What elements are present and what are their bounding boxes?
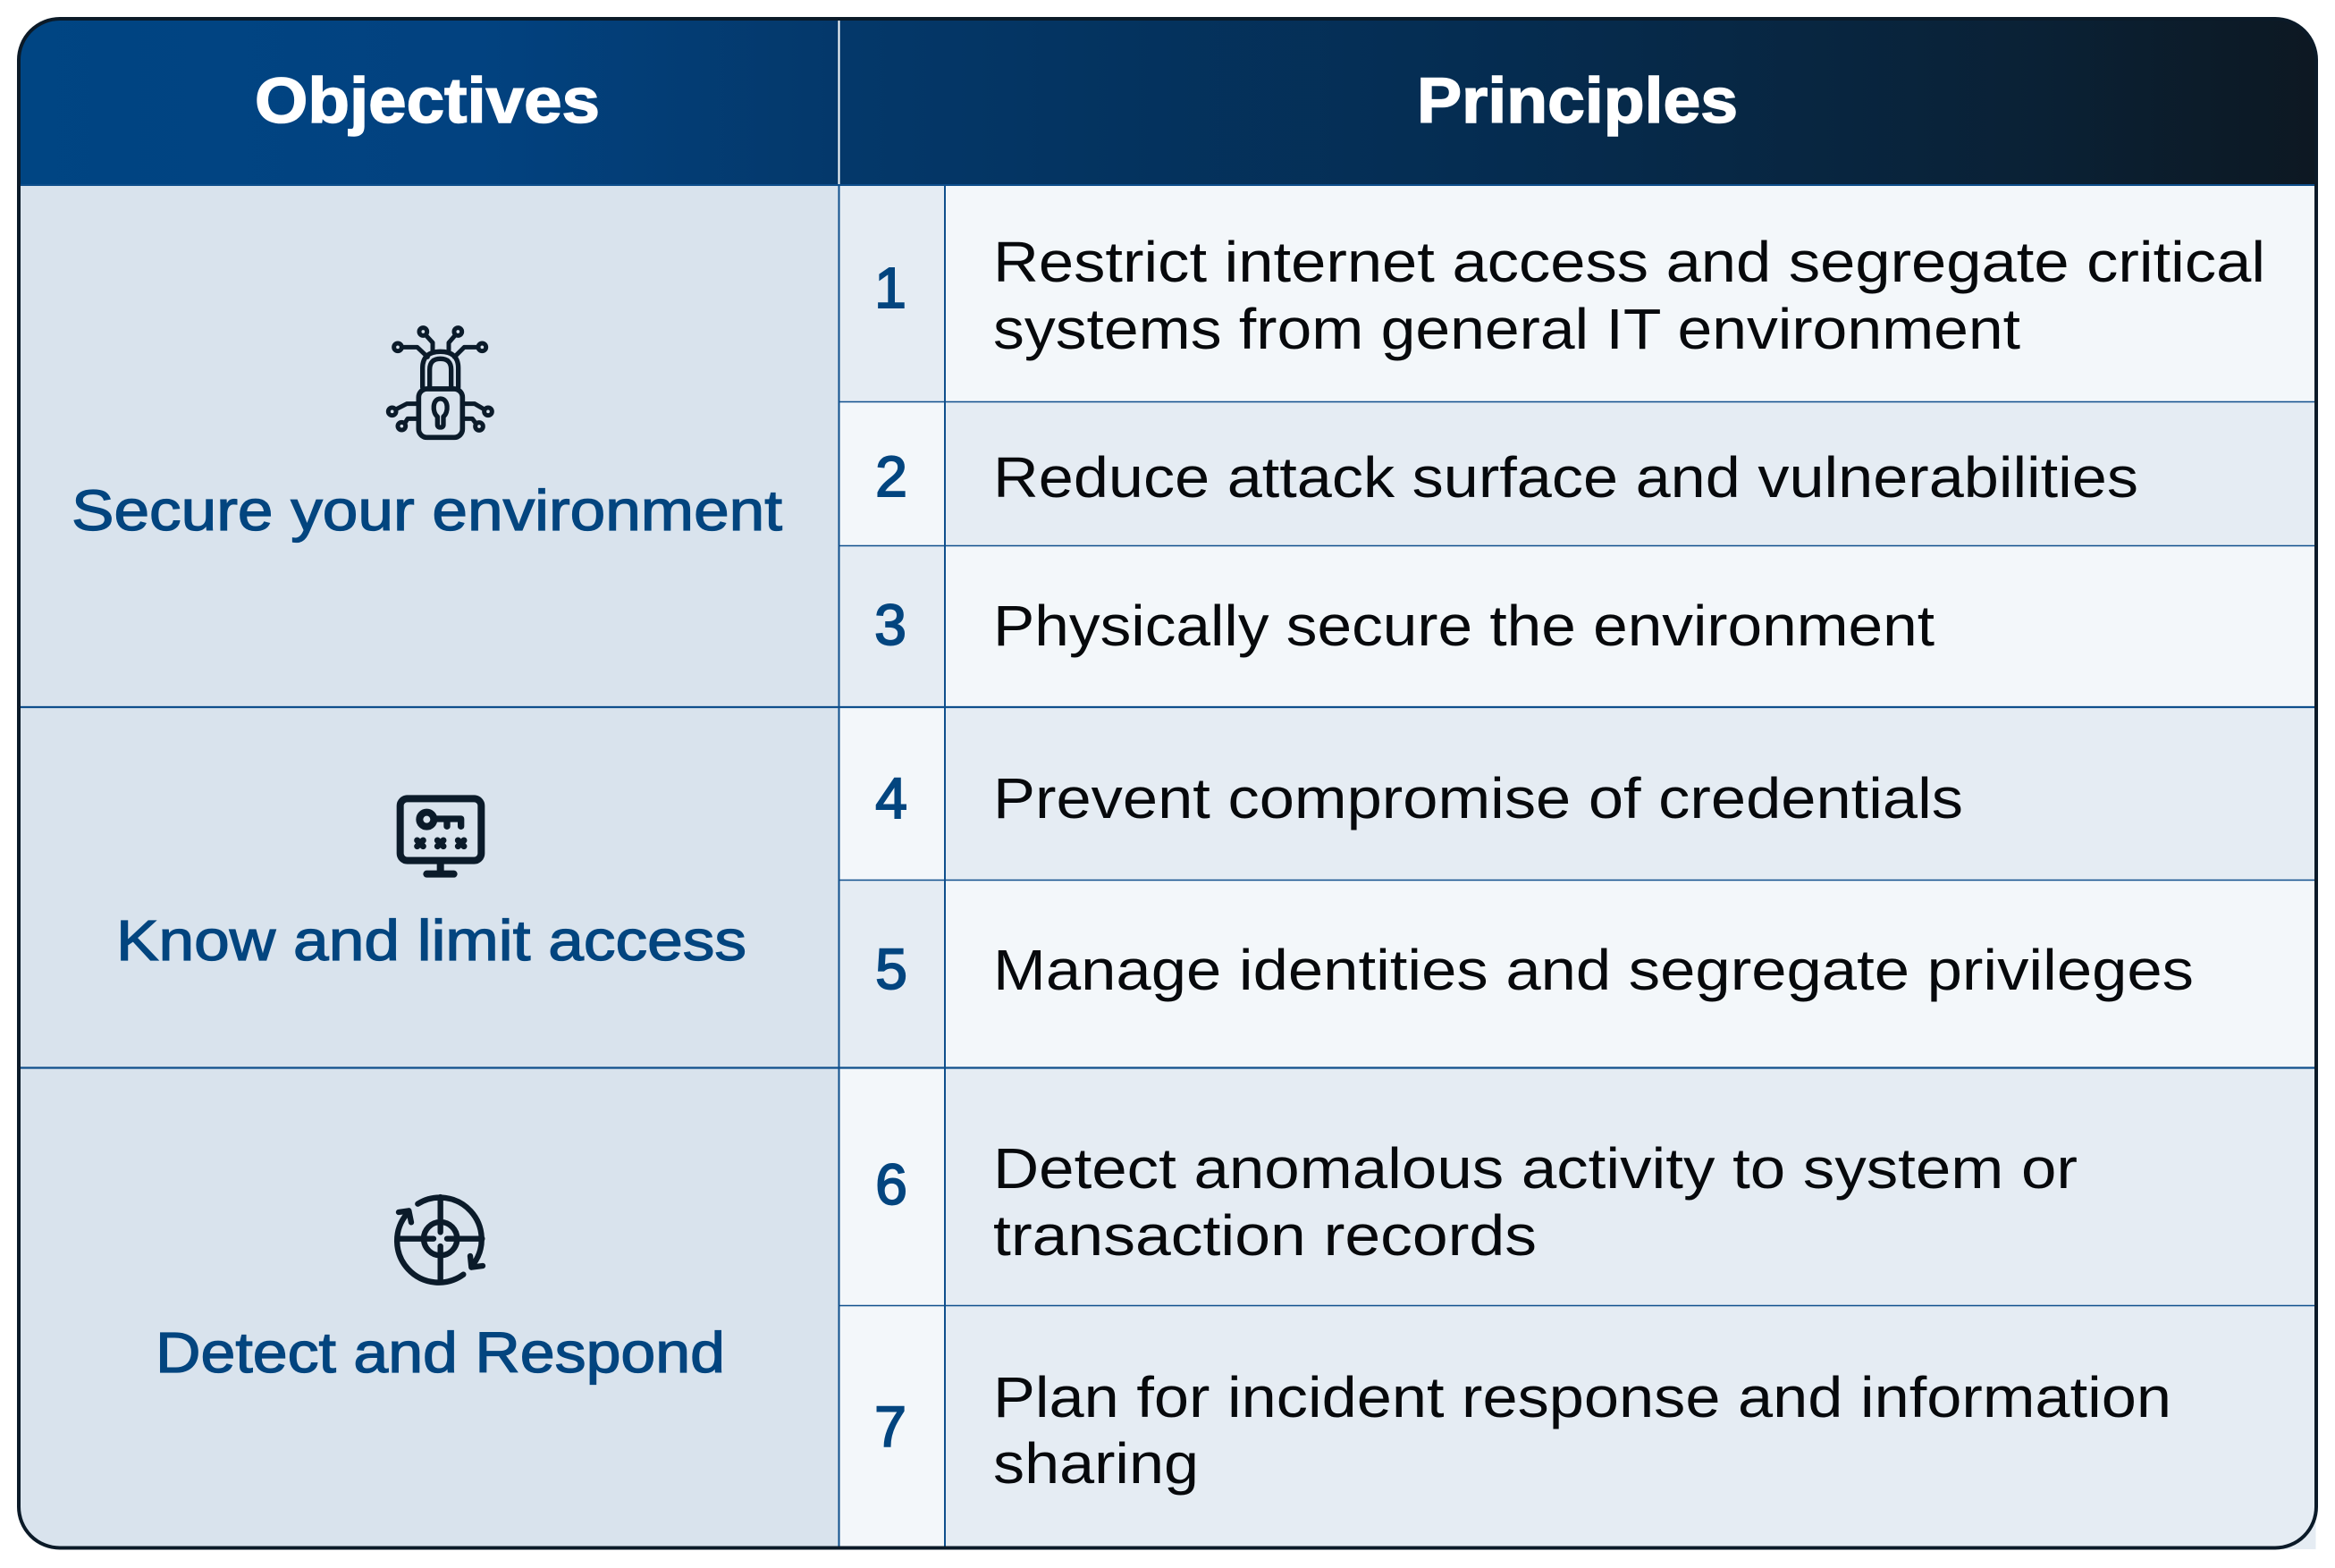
objectives column background	[17, 185, 839, 1550]
icon: monitor with key and password	[400, 798, 481, 874]
number 1: 1	[874, 256, 906, 320]
principle 7: Plan for incident response and information	[993, 1365, 2171, 1429]
heading: Objectives: Objectives	[255, 66, 600, 137]
number 2: 2	[875, 444, 907, 509]
principle 7: sharing	[993, 1431, 1199, 1496]
number column backgrounds	[839, 185, 946, 1550]
number 7: 7	[874, 1395, 906, 1459]
principle 4: Prevent compromise of credentials	[993, 766, 1963, 830]
label: Know and limit access: Know and limit access	[116, 908, 746, 973]
icon: padlock with circuit	[388, 328, 492, 437]
principle 6: transaction records	[993, 1203, 1537, 1268]
label: Detect and Respond: Detect and Respond	[156, 1320, 725, 1385]
principle 3: Physically secure the environment	[993, 594, 1935, 658]
principle 7	[993, 1365, 2171, 1496]
principle 2: Reduce attack surface and vulnerabilities	[993, 445, 2138, 510]
number 5: 5	[875, 937, 907, 1001]
label: Secure your environment: Secure your environment	[72, 478, 782, 543]
number 3: 3	[874, 593, 906, 657]
principle 1	[993, 230, 2265, 361]
principle 1: Restrict internet access and segregate critical	[993, 230, 2265, 294]
number 6: 6	[875, 1152, 907, 1217]
principle row backgrounds	[946, 185, 2318, 1550]
number 4: 4	[875, 766, 907, 830]
principle 1: systems from general IT environment	[993, 297, 2020, 361]
header band	[17, 17, 2318, 185]
icon: target with rotating arrows	[397, 1197, 483, 1283]
principle 6	[993, 1136, 2078, 1268]
principle 5: Manage identities and segregate privileges	[993, 938, 2194, 1002]
principle 6: Detect anomalous activity to system or	[993, 1136, 2078, 1201]
heading: Principles: Principles	[1417, 66, 1738, 137]
